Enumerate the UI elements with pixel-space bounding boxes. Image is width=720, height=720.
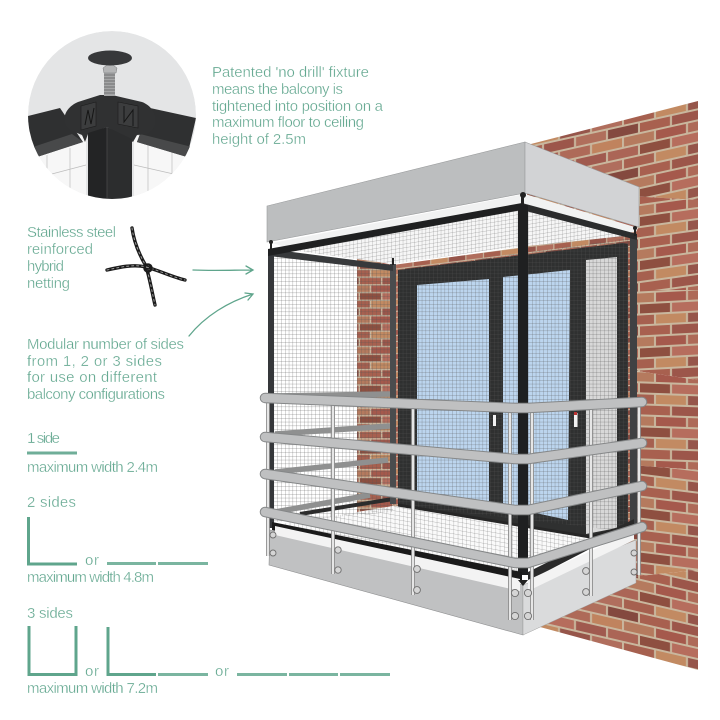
door handles [493,412,578,427]
side rail shadows seen through netting [275,394,390,512]
text: modular sides: for use on different [27,369,158,386]
door right glass [586,257,617,534]
legend: 2 sides: 2 sides [27,494,76,511]
text: netting [27,224,116,292]
text: no drill fixture [212,64,384,148]
left side top rail [269,249,393,271]
text: netting: reinforced [27,241,93,258]
legend: 1 side: 1 side [27,430,60,447]
standoff bolts [270,532,637,620]
arrow: modular sides [189,293,253,336]
text: netting: hybrid [27,258,64,275]
circular detail: no drill fixture [28,31,196,199]
legend: 3 sides: 3 sides [27,605,73,622]
text: netting: Stainless steel [27,224,116,241]
ceiling [290,208,624,264]
steel frame [268,192,637,581]
floor rail left [272,522,522,581]
front top rail right [522,203,637,240]
text: modular sides: Modular number of sides [27,336,184,353]
brick wall [527,101,698,670]
text: modular sides [27,336,184,403]
legend: 1 side [27,430,158,476]
netting overlay [274,208,630,572]
text: modular sides: balcony configurations [27,386,165,403]
legend: 2 sides: or [85,552,99,569]
legend: 2 sides: maximum width 4.8m [27,569,154,586]
left arm [28,108,83,157]
door centre glass [503,270,570,520]
legend: 1 side: maximum width 2.4m [27,459,158,476]
icon: netting knot [107,228,185,305]
door bottom rail [398,505,628,537]
left post [268,250,274,528]
arrow: netting [193,266,253,274]
back post [390,264,396,504]
text: no drill fixture: height of 2.5m [212,131,306,148]
legend: 2 sides [27,494,208,586]
text: no drill fixture: means the balcony is [212,81,343,98]
legend: 3 sides [27,605,390,697]
wall tiles [40,136,184,196]
post [88,127,132,199]
text: no drill fixture: Patented 'no drill' fixture [212,64,369,81]
text: netting: netting [27,275,70,292]
text: modular sides: from 1, 2 or 3 sides [27,353,162,370]
legend: 3 sides: or [215,663,229,680]
legend: 3 sides: or [85,663,99,680]
floor rail right [528,519,634,581]
corner post [518,205,528,575]
legend: 3 sides: maximum width 7.2m [27,680,158,697]
fixtures [269,192,637,265]
door frame [398,243,628,538]
top disc [88,50,132,66]
right arm [137,108,196,157]
door left glass [417,279,489,502]
back floor rail [300,499,393,514]
roof box [267,142,639,250]
handrails [265,398,642,563]
balcony interior [274,208,634,572]
bolt [103,65,117,96]
bottom panel [269,526,636,635]
text: no drill fixture: maximum floor to ceiling [212,114,364,131]
front top rail left [268,203,522,256]
text: no drill fixture: tightened into position on a [212,98,384,115]
back brick wall [357,232,634,532]
right post [630,235,637,530]
railing stanchions [268,398,639,620]
hub [64,95,156,142]
left interior side [274,252,357,520]
floor [274,506,590,572]
